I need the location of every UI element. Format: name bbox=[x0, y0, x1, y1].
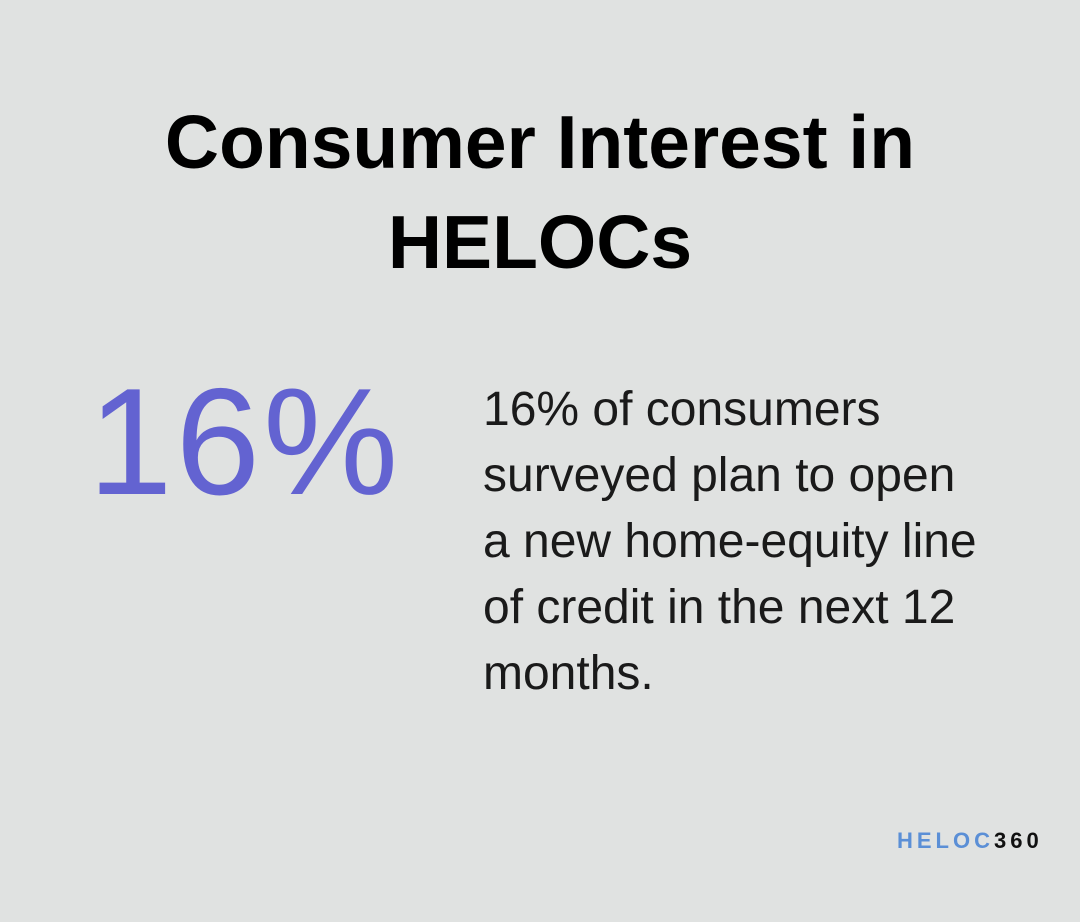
description text: 16% of consumers surveyed plan to open a new home-equity line of credit in the next 12 months. bbox=[483, 383, 977, 700]
title: Consumer Interest in bbox=[165, 100, 915, 184]
big stat: 16% bbox=[88, 357, 401, 527]
title bbox=[165, 100, 915, 284]
logo: HELOC360 bbox=[897, 828, 1043, 853]
title: HELOCs bbox=[388, 200, 692, 284]
